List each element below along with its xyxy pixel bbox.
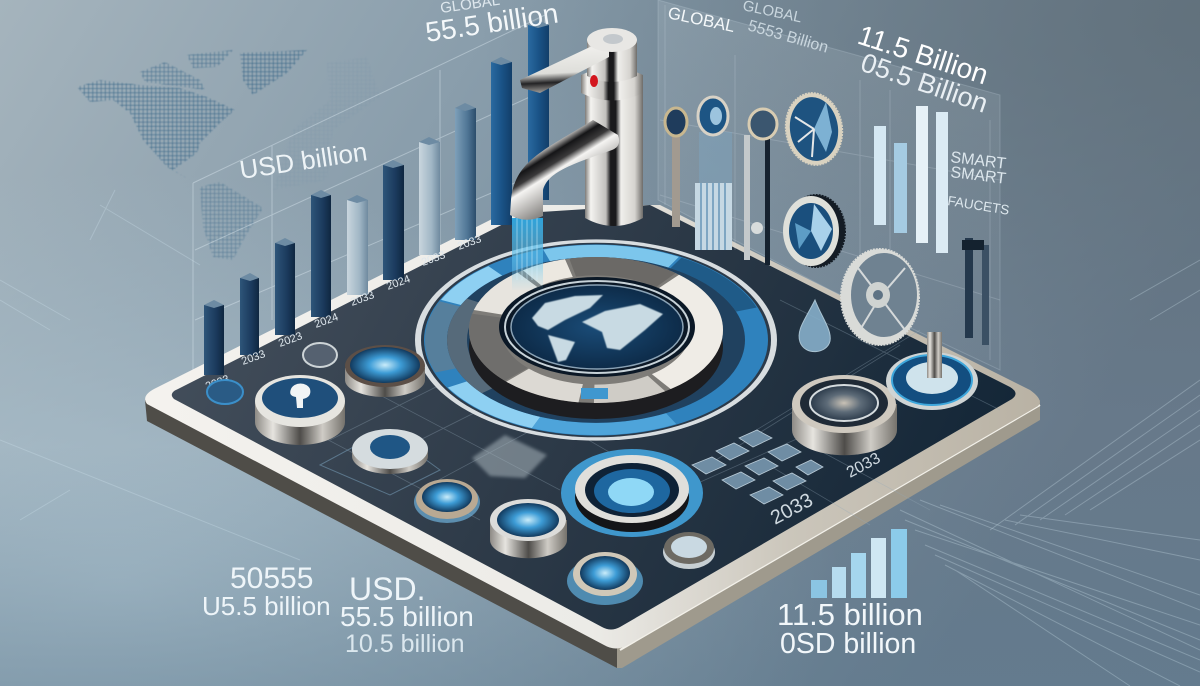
knob: question badge [255, 375, 345, 445]
water stream [512, 218, 543, 290]
outer ring [415, 239, 777, 441]
bottom right values: 11.5 billion [777, 597, 923, 632]
knob: blue pin sensor [886, 332, 978, 410]
device cluster [472, 435, 547, 478]
label: smart faucets: FAUCETS [947, 193, 1010, 218]
bar year labels: 2023 [204, 373, 231, 393]
bottom left values: 50555 [230, 562, 313, 595]
map: Arctic islands [140, 50, 233, 90]
bar year labels: 2033 [456, 233, 483, 253]
bottom centre values: 55.5 billion [340, 601, 474, 632]
map: North America [77, 80, 235, 180]
board highlight line [620, 405, 1040, 650]
knob: blue lens [414, 479, 480, 523]
knob: large blue target [561, 449, 703, 537]
label: smart faucets [947, 149, 1010, 218]
icon: gear wheel [841, 249, 919, 345]
board rim [145, 205, 1040, 648]
knob: small lens [663, 532, 715, 569]
board right side [617, 400, 1040, 668]
board left side [145, 400, 617, 668]
keypad grid [692, 430, 823, 504]
label: USD billion: USD billion [237, 136, 369, 185]
globe continents [532, 295, 663, 362]
heading: top right: GLOBAL [666, 3, 737, 36]
icon: small pin gauge [665, 108, 687, 227]
heading: top right [666, 0, 830, 57]
year labels on board [767, 450, 883, 529]
blue ring segments [436, 251, 756, 429]
left control knobs [207, 343, 715, 605]
faucet spout [510, 120, 619, 220]
icon: dial with grille [695, 97, 732, 250]
bar year labels: 2033 [420, 249, 447, 269]
board base [145, 205, 1040, 668]
map: Greenland [240, 50, 307, 95]
map: South America [200, 182, 263, 260]
board surface [172, 205, 1016, 630]
bar year labels: 2033 [240, 348, 267, 368]
icon: water drop [799, 300, 830, 352]
year labels on board: 2033 [844, 450, 883, 482]
faucet neck [587, 40, 637, 82]
faucet collar [581, 68, 643, 100]
knob: aqua lens [490, 499, 567, 558]
bottom centre values [340, 571, 474, 658]
icon: keyhole gauge [744, 109, 777, 265]
right control knobs [692, 332, 978, 504]
gauges and dials [665, 89, 989, 352]
icon: wheel dial upper [781, 89, 847, 169]
bar year labels: 2024 [385, 273, 412, 293]
bottom left values: U5.5 billion [202, 591, 331, 621]
red indicator [590, 75, 598, 87]
bar chart: market growth [204, 20, 549, 375]
bar year labels: 2023 [277, 330, 304, 350]
label: smart faucets: SMART [950, 164, 1007, 188]
steel ring side [469, 275, 723, 419]
right glass panel [658, 0, 1000, 370]
bar year labels: 2033 [349, 289, 376, 309]
icon: valve stack [962, 238, 989, 345]
knob: camera lens [320, 429, 440, 495]
knob: mesh steel [792, 375, 897, 455]
bar chart: glass panel [874, 106, 948, 253]
mini bar chart bottom [811, 529, 907, 598]
small icon: swirl [303, 343, 337, 367]
readout tab [581, 388, 608, 399]
map: faint eastern continents [273, 57, 380, 190]
value: 11.5 billion: 05.5 Billion [857, 47, 992, 119]
bottom centre values: 10.5 billion [345, 630, 465, 658]
faucet lever [520, 47, 609, 93]
world map dotted projection [77, 50, 380, 260]
steel ring segments [485, 266, 707, 394]
central dial [415, 239, 777, 441]
knob: water ripple [345, 345, 425, 397]
faucet cap [587, 28, 637, 52]
bottom right values [777, 597, 923, 660]
faucet [510, 28, 643, 226]
cap inset [603, 34, 623, 44]
bottom left values [202, 562, 331, 621]
bottom right values: 0SD billion [780, 628, 916, 660]
glass globe screen [499, 277, 695, 377]
icon: pie dial lower [783, 195, 845, 267]
year labels on board: 2033 [767, 489, 817, 529]
chart guide lines [193, 15, 545, 375]
value: 11.5 billion: 11.5 Billion [854, 19, 992, 90]
label: smart faucets: SMART [950, 149, 1007, 173]
small icon: left badge [207, 380, 243, 404]
steel ring face [469, 257, 723, 403]
heading: top right: 5553 Billion [746, 18, 830, 57]
bar year labels [204, 233, 483, 393]
knob: bottom lens [567, 552, 643, 605]
bar year labels: 2024 [313, 311, 340, 331]
faucet body [585, 93, 643, 226]
bottom centre values: USD. [349, 571, 425, 607]
